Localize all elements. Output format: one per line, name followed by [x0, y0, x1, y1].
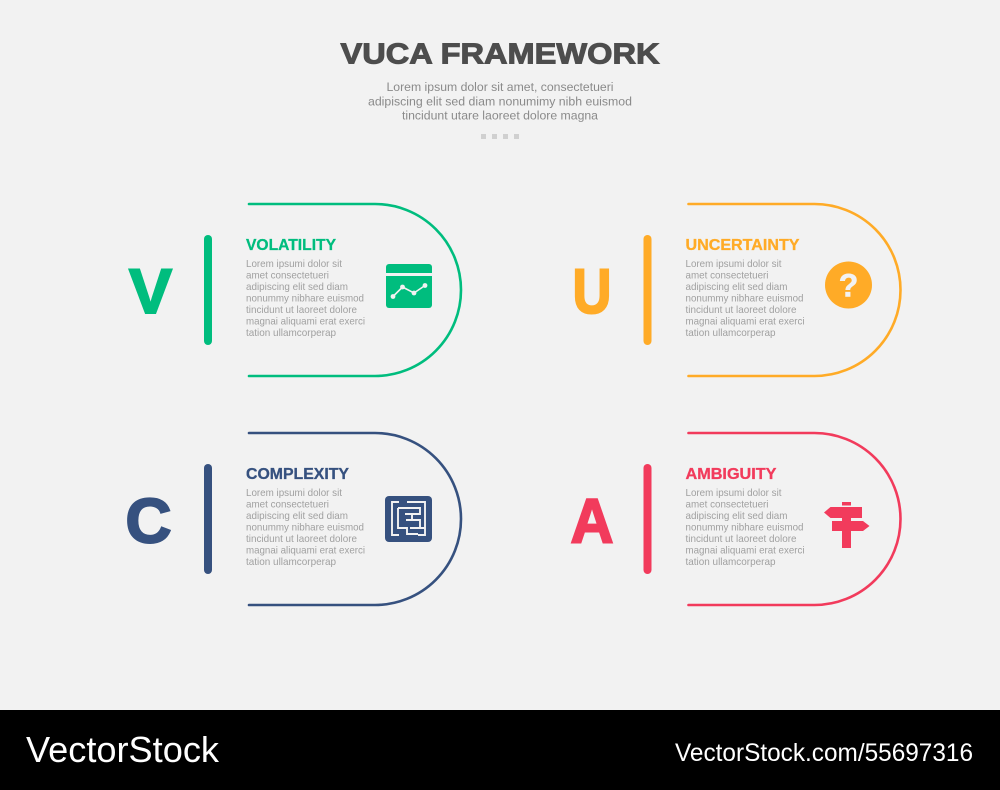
letter A: A — [570, 486, 614, 556]
panel outline: uncertainty — [688, 204, 900, 376]
body text: ambiguity: Lorem ipsumi dolor sit — [686, 488, 782, 499]
body text: ambiguity: nonummy nibhare euismod — [686, 522, 804, 534]
body text: complexity: tation ullamcorperap — [246, 557, 336, 568]
body text: complexity: amet consectetueri — [246, 500, 329, 510]
divider bar — [204, 464, 212, 574]
body text: ambiguity: tincidunt ut laoreet dolore — [686, 534, 797, 545]
panel: volatility — [129, 204, 461, 376]
body text: volatility: tation ullamcorperap — [246, 328, 336, 339]
body text: volatility — [246, 259, 365, 339]
body text: uncertainty: adipiscing elit sed diam — [686, 282, 788, 293]
body text: uncertainty: tation ullamcorperap — [686, 328, 776, 339]
heading: volatility: VOLATILITY — [246, 237, 336, 254]
subtitle text block — [368, 80, 632, 123]
divider bar — [204, 235, 212, 345]
body text: complexity: adipiscing elit sed diam — [246, 511, 348, 522]
body text: ambiguity — [686, 488, 804, 568]
heading: uncertainty: UNCERTAINTY — [686, 237, 800, 254]
icon: line chart window — [386, 264, 432, 308]
body text: volatility: adipiscing elit sed diam — [246, 282, 348, 293]
body text: uncertainty: amet consectetueri — [686, 270, 768, 282]
body text: uncertainty: magnai aliquami erat exerci — [686, 316, 804, 328]
icon: question mark circle — [825, 262, 872, 308]
body text: uncertainty: tincidunt ut laoreet dolore — [686, 305, 797, 316]
panel: complexity — [126, 433, 461, 605]
body text: complexity: tincidunt ut laoreet dolore — [246, 534, 357, 545]
body text: uncertainty: nonummy nibhare euismod — [686, 294, 804, 304]
body text: volatility: amet consectetueri — [246, 270, 329, 282]
divider bar — [644, 235, 652, 345]
icon: signpost — [824, 502, 870, 548]
heading: ambiguity: AMBIGUITY — [686, 466, 777, 483]
body text: complexity: nonummy nibhare euismod — [246, 522, 364, 534]
body text: complexity: Lorem ipsumi dolor sit — [246, 488, 342, 499]
body text: complexity — [246, 488, 365, 568]
footer id text: VectorStock.com/55697316 — [675, 739, 973, 767]
body text: uncertainty: Lorem ipsumi dolor sit — [686, 259, 782, 270]
letter U: U — [572, 257, 612, 327]
body text: ambiguity: magnai aliquami erat exerci — [686, 546, 804, 556]
title: VUCA FRAMEWORK — [340, 38, 660, 70]
letter V: V — [129, 257, 172, 327]
footer bar — [0, 710, 1000, 790]
icon: question mark circle: ? — [839, 268, 858, 304]
body text: complexity: magnai aliquami erat exerci — [246, 546, 365, 556]
heading: complexity: COMPLEXITY — [246, 466, 349, 483]
subtitle text block: tincidunt utare laoreet dolore magna — [402, 109, 598, 123]
panel outline: complexity — [249, 433, 461, 605]
body text: volatility: tincidunt ut laoreet dolore — [246, 305, 357, 316]
body text: ambiguity: tation ullamcorperap — [686, 557, 776, 568]
body text: ambiguity: adipiscing elit sed diam — [686, 511, 788, 522]
letter C: C — [126, 486, 172, 556]
panel: uncertainty — [572, 204, 900, 376]
body text: ambiguity: amet consectetueri — [686, 500, 768, 510]
body text: volatility: Lorem ipsumi dolor sit — [246, 259, 342, 270]
decorative dots — [481, 134, 519, 139]
body text: volatility: magnai aliquami erat exerci — [246, 316, 365, 328]
body text: volatility: nonummy nibhare euismod — [246, 294, 364, 304]
divider bar — [644, 464, 652, 574]
subtitle text block: adipiscing elit sed diam nonumimy nibh euismod — [368, 94, 632, 108]
icon: maze — [385, 496, 432, 542]
footer logo text: VectorStock — [26, 729, 220, 770]
panel outline: volatility — [249, 204, 461, 376]
panel outline: ambiguity — [688, 433, 900, 605]
panel: ambiguity — [570, 433, 900, 605]
subtitle text block: Lorem ipsum dolor sit amet, consectetueri — [386, 80, 614, 94]
body text: uncertainty — [686, 259, 804, 339]
